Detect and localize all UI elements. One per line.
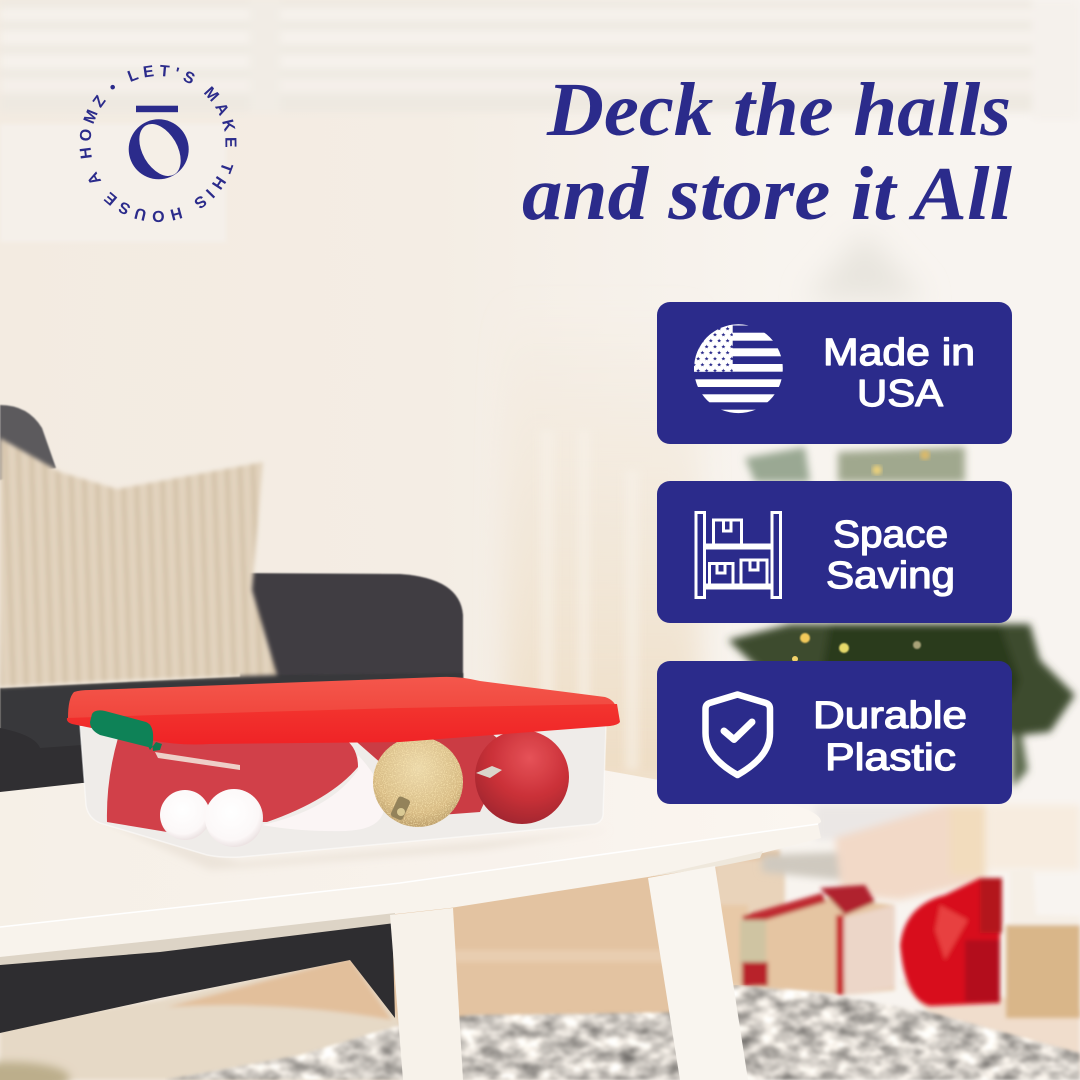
table apron right [648, 851, 763, 877]
sofa base [0, 915, 395, 1033]
lid [67, 677, 620, 744]
hat trim [262, 755, 384, 831]
curtain folds [540, 430, 639, 770]
table [0, 770, 821, 1080]
badge text: USA [857, 373, 944, 415]
lid top [68, 677, 617, 722]
table edge [0, 824, 821, 957]
translucent box front [80, 726, 606, 857]
santa hat back [350, 732, 505, 815]
curtain [505, 300, 700, 790]
red ornament [475, 730, 569, 824]
gift boxes [718, 868, 1080, 1018]
lower left floor [0, 955, 400, 1080]
sofa lower cushions [0, 728, 85, 795]
heading line 1: Deck the halls [546, 68, 1011, 152]
table crease line [0, 824, 818, 927]
storage box with ornaments [67, 677, 620, 870]
lid front [67, 704, 620, 744]
pompom right [205, 789, 263, 847]
badge: durable plastic [657, 661, 1012, 804]
table top [0, 770, 821, 927]
sofa seat [0, 673, 463, 800]
badge: space saving [657, 481, 1012, 623]
logo circle inner [131, 117, 189, 183]
rug [165, 985, 1080, 1080]
badge text: Durable [813, 695, 967, 737]
sofa [0, 405, 463, 1033]
sofa far arm [0, 405, 56, 480]
badge: made in USA [657, 302, 1012, 444]
logo circle [129, 119, 189, 179]
logo circular text: • LET'S MAKE THIS HOUSE A HOMZ [80, 64, 236, 222]
badge text: Space [833, 514, 948, 556]
icon: shield with check [706, 694, 770, 775]
badge text: Saving [826, 555, 955, 597]
badge text [823, 332, 975, 415]
box shadow [90, 815, 610, 870]
floor [340, 850, 1080, 1075]
christmas tree [728, 447, 1075, 788]
box body [80, 726, 606, 857]
badge text: Plastic [825, 737, 956, 779]
table leg left [390, 908, 463, 1080]
blurred tree top [805, 232, 925, 300]
table apron [0, 913, 395, 965]
wall panel [0, 124, 226, 242]
heading [522, 68, 1012, 236]
badge text [813, 695, 967, 779]
background boxes [762, 805, 1080, 900]
green clasp [90, 710, 162, 751]
gold ornament [373, 737, 463, 827]
icon: shelving with boxes [696, 512, 780, 598]
sofa arm [240, 573, 463, 690]
pompom left [160, 790, 210, 840]
table leg right [648, 866, 748, 1080]
cushion [0, 438, 277, 687]
heading line 2: and store it All [522, 152, 1012, 236]
badge text [826, 514, 955, 597]
window blinds [0, 0, 1080, 120]
logo bar [136, 106, 178, 112]
logo badge [80, 64, 236, 222]
santa hat [107, 736, 358, 832]
badge text: Made in [823, 332, 975, 374]
handle highlight [155, 752, 240, 770]
icon: US flag [690, 324, 786, 414]
